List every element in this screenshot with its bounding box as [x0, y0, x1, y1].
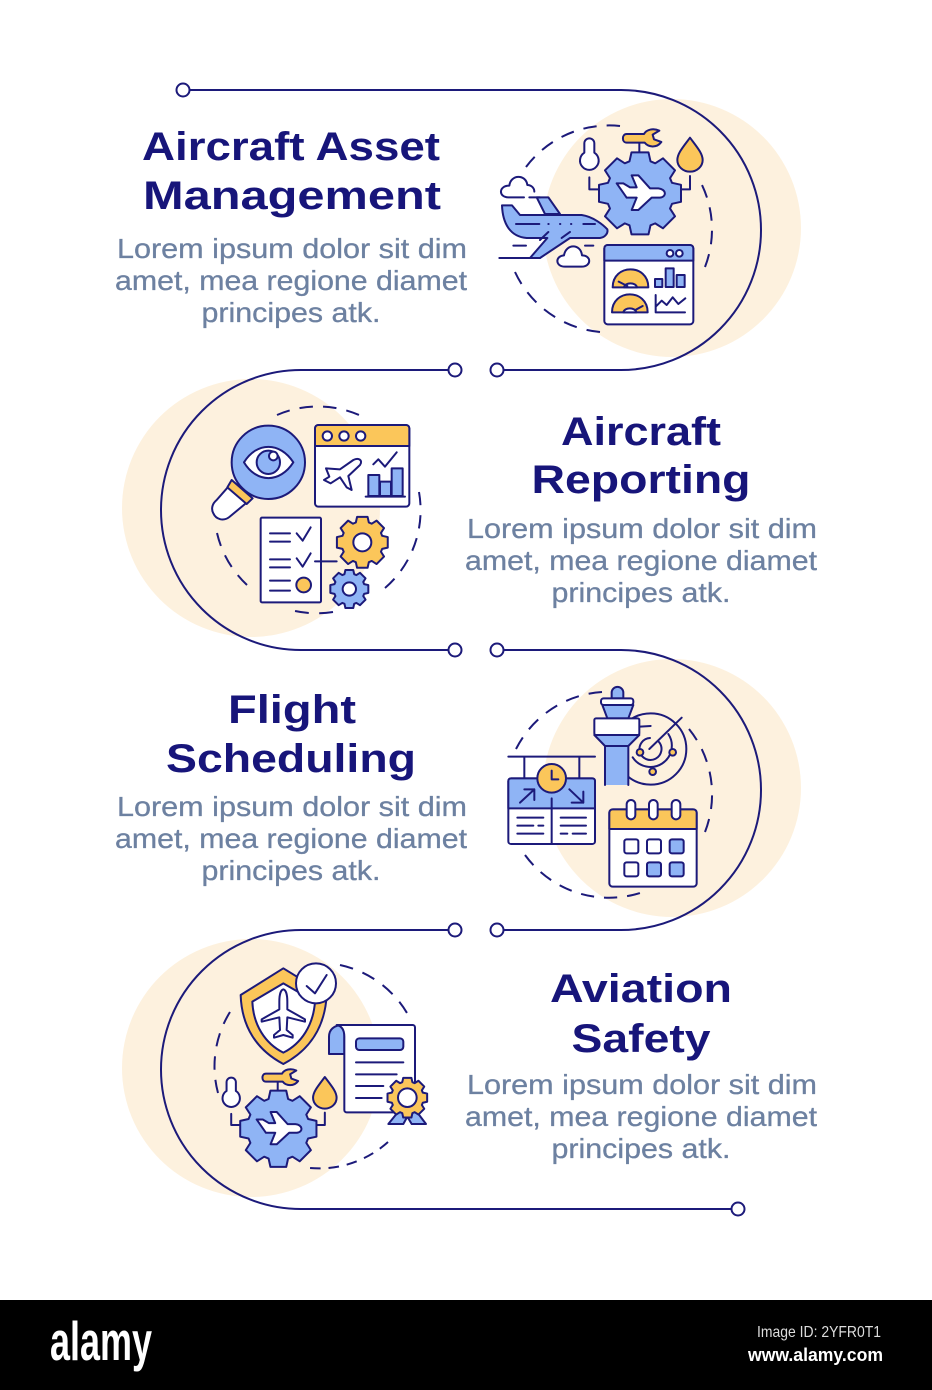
text block: Lorem ipsum dolor sit dim — [467, 513, 817, 544]
heading — [166, 688, 416, 781]
panel: aircraft asset management — [115, 84, 801, 376]
icon: lower cloud — [557, 246, 589, 267]
icon: departures board — [508, 757, 595, 844]
footer bar — [0, 1300, 932, 1390]
heading — [532, 410, 750, 502]
icon: blue gear — [330, 570, 368, 608]
cream circle — [122, 379, 380, 637]
text block: principes atk. — [202, 855, 380, 886]
cream circle — [543, 659, 801, 917]
icon: magnifier with eye — [212, 426, 305, 519]
end dot — [490, 364, 504, 376]
icon: top cloud — [501, 177, 534, 197]
footer logo: alamy — [50, 1310, 152, 1372]
text block: amet, mea regione diamet — [465, 545, 817, 576]
dashed ring — [516, 692, 712, 898]
start dot — [448, 364, 462, 376]
icon: reporting — [212, 425, 409, 608]
start dot — [176, 84, 190, 96]
icon: gear with wrench, thermometer and drop — [223, 1069, 337, 1167]
icon: dashboard window — [604, 245, 693, 324]
dashed ring — [214, 965, 407, 1168]
heading: Scheduling — [166, 737, 416, 781]
heading: Aircraft — [561, 410, 721, 454]
end dot — [490, 924, 504, 936]
text block: Lorem ipsum dolor sit dim — [117, 791, 467, 822]
text block: Lorem ipsum dolor sit dim — [117, 233, 467, 264]
text block: amet, mea regione diamet — [115, 265, 467, 296]
timeline connector — [497, 650, 761, 930]
icon: shield with airplane — [241, 963, 336, 1064]
icon: control tower — [594, 687, 639, 785]
icon: airplane — [499, 197, 608, 258]
icon: certificate — [329, 1025, 427, 1124]
panel: flight scheduling — [115, 644, 801, 936]
timeline connector — [183, 90, 761, 370]
heading: Reporting — [532, 458, 750, 502]
text block: principes atk. — [552, 1133, 730, 1164]
text block: amet, mea regione diamet — [115, 823, 467, 854]
icon: calendar — [609, 800, 697, 887]
cream circle — [122, 939, 380, 1197]
heading — [550, 967, 732, 1061]
image id: Image ID: 2YFR0T1 — [757, 1324, 881, 1341]
text block — [465, 513, 817, 608]
timeline connector — [161, 370, 455, 650]
panel: aircraft reporting — [122, 364, 817, 656]
text block: amet, mea regione diamet — [465, 1101, 817, 1132]
heading: Safety — [572, 1017, 711, 1061]
icon: report window — [315, 425, 409, 507]
icon: checklist — [261, 518, 337, 602]
dashed ring — [217, 406, 421, 613]
end dot — [448, 644, 462, 656]
text block — [115, 791, 467, 886]
icon: scheduling — [508, 687, 697, 887]
dashed ring — [515, 125, 712, 332]
end dot — [732, 1202, 744, 1216]
panel: aviation safety — [122, 924, 817, 1216]
icon: aircraft maintenance and dashboard — [499, 129, 703, 324]
icon: radar — [615, 713, 686, 785]
cream circle — [543, 99, 801, 357]
text block — [465, 1069, 817, 1164]
text block: principes atk. — [202, 297, 380, 328]
heading: Aviation — [550, 967, 732, 1011]
start dot — [490, 644, 504, 656]
icon: safety — [223, 963, 427, 1167]
timeline connector — [161, 930, 738, 1209]
footer url: www.alamy.com — [747, 1345, 883, 1365]
text block: principes atk. — [552, 577, 730, 608]
heading: Aircraft Asset — [142, 125, 440, 169]
heading: Flight — [228, 688, 356, 732]
text block: Lorem ipsum dolor sit dim — [467, 1069, 817, 1100]
text block — [115, 233, 467, 328]
start dot — [448, 924, 462, 936]
icon: yellow gear — [337, 517, 388, 568]
heading: Management — [143, 174, 441, 218]
heading — [142, 125, 441, 218]
